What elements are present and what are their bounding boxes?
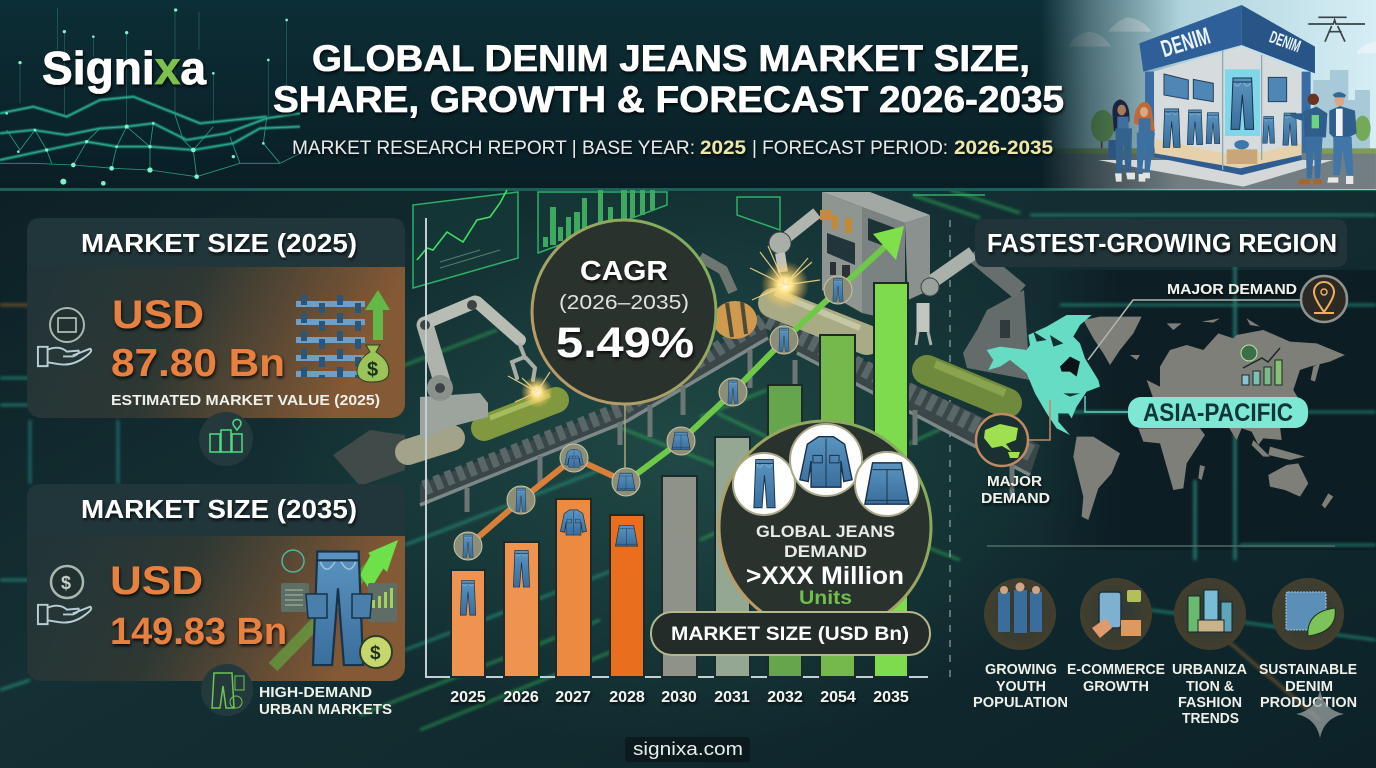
logo: Signixa [42, 42, 206, 94]
watermark sparkle [1296, 690, 1344, 738]
label: major demand left [981, 473, 1050, 507]
factor: e-commerce growth: E-COMMERCE [1067, 662, 1165, 678]
factory illustration [333, 190, 1040, 512]
factor: sustainable denim production: PRODUCTION [1260, 695, 1357, 711]
factor: growing youth population: YOUTH [996, 679, 1046, 695]
label: major demand left: DEMAND [981, 490, 1050, 507]
value: 149.83 Bn [110, 611, 287, 653]
world map [987, 315, 1345, 520]
year labels: 2032 [767, 689, 803, 706]
network graphic [0, 8, 300, 186]
year labels: 2054 [820, 689, 856, 706]
subtitle: | FORECAST PERIOD: [752, 138, 948, 159]
control cabinet [822, 192, 930, 323]
icon: people [998, 582, 1042, 633]
ground [1040, 153, 1376, 189]
green cylinders [484, 400, 556, 428]
robot arm top [769, 210, 832, 272]
skyline [1313, 70, 1370, 150]
legend pill: market size [651, 612, 930, 655]
icon: growth on map [1241, 345, 1282, 385]
subtitle: MARKET RESEARCH REPORT | BASE YEAR: [292, 138, 695, 159]
conveyor rising [420, 317, 768, 512]
subtitle [292, 138, 1053, 159]
demand text: Units [799, 588, 852, 609]
demand text: GLOBAL JEANS [756, 522, 895, 541]
label: major demand top: MAJOR DEMAND [1167, 281, 1297, 298]
heading: fastest-growing region: FASTEST-GROWING REGION [987, 228, 1337, 258]
callout: CAGR: CAGR [580, 255, 668, 286]
icon: location pin [1301, 276, 1347, 322]
icon: hand with device [38, 308, 91, 366]
panel header [27, 484, 405, 536]
footer [625, 737, 750, 762]
store illustration: DENIM [1158, 23, 1214, 63]
panel: market size 2035 [27, 484, 405, 681]
stem [624, 400, 626, 472]
bars [451, 283, 908, 677]
clouds [1068, 17, 1376, 53]
icon: hand with coin: $ [61, 573, 71, 593]
year labels: 2028 [609, 689, 645, 706]
callout: CAGR: 5.49% [556, 319, 694, 367]
caption: high-demand urban markets: HIGH-DEMAND [259, 685, 372, 701]
badge: asia-pacific: ASIA-PACIFIC [1143, 399, 1293, 427]
conveyor falling [758, 310, 1040, 500]
trend arrow [454, 226, 904, 560]
icon: skyscrapers [1188, 590, 1232, 632]
panel header: MARKET SIZE (2025) [81, 228, 357, 258]
sparks [508, 246, 820, 408]
divider [987, 545, 1335, 547]
caption: ESTIMATED MARKET VALUE (2025) [111, 392, 380, 409]
icon: phone and box [1092, 590, 1141, 638]
year labels: 2026 [503, 689, 539, 706]
connector: major demand top [1088, 300, 1301, 360]
footer: signixa.com [633, 739, 743, 759]
year labels: 2030 [661, 689, 697, 706]
orange drum [713, 301, 757, 339]
icon: urban market jeans [201, 664, 253, 716]
store illustration [1040, 0, 1376, 190]
factor: e-commerce growth [1067, 578, 1165, 695]
icon: denim patch with leaf [1286, 592, 1335, 636]
base behind left panel [333, 430, 405, 486]
factor: urbanization and fashion trends: FASHION [1178, 695, 1242, 711]
icon: jeans [733, 453, 795, 515]
factor: growing youth population: GROWING [985, 662, 1057, 678]
panel header [27, 218, 405, 267]
icon: skirt [855, 452, 919, 516]
callout: global jeans demand [719, 421, 931, 633]
factor: sustainable denim production: DENIM [1285, 679, 1333, 695]
people [1108, 92, 1357, 184]
icon: denim weave with arrow and money bag [296, 290, 390, 382]
year labels: 2035 [873, 689, 909, 706]
factor: growing youth population: POPULATION [973, 695, 1068, 711]
factor: urbanization and fashion trends: TION & [1186, 679, 1235, 695]
demand text: >XXX Million [746, 562, 904, 590]
year labels: 2025 [450, 689, 486, 706]
bar chart [426, 218, 928, 706]
caption: high-demand urban markets [259, 685, 392, 718]
factor: sustainable denim production: SUSTAINABLE [1259, 662, 1357, 678]
factor: urbanization and fashion trends [1172, 578, 1248, 727]
subtitle: 2026-2035 [954, 138, 1053, 159]
tan cylinders [408, 438, 452, 452]
factor: urbanization and fashion trends: TRENDS [1182, 711, 1239, 727]
value [111, 293, 285, 385]
value: USD [112, 293, 204, 337]
title: GLOBAL DENIM JEANS MARKET SIZE, [312, 38, 1030, 79]
factor: urbanization and fashion trends: URBANIZA [1172, 662, 1248, 678]
store sign [1139, 5, 1242, 72]
icon: jeans with growth arrow [273, 540, 398, 668]
demand text: DEMAND [784, 542, 867, 561]
trees [1091, 110, 1371, 148]
factor: growing youth population [973, 578, 1068, 711]
factor: e-commerce growth: GROWTH [1083, 679, 1149, 695]
year labels: 2031 [714, 689, 750, 706]
panel header: MARKET SIZE (2035) [81, 494, 357, 524]
icon: denim weave with arrow and money bag: $ [367, 359, 378, 381]
connector: major demand left [1028, 400, 1050, 440]
year labels [450, 689, 909, 706]
robot arm behind CAGR [700, 257, 733, 292]
title: SHARE, GROWTH & FORECAST 2026-2035 [273, 79, 1064, 120]
header band [0, 0, 1376, 191]
icon: jacket [790, 424, 862, 496]
monitor screens [413, 192, 985, 288]
icon: asia map circle [976, 414, 1028, 466]
store illustration: DENIM [1267, 27, 1304, 56]
robot arm right [916, 253, 1030, 380]
subtitle: 2025 [700, 138, 746, 159]
store [1153, 47, 1302, 175]
icon: city pin [199, 412, 253, 466]
icon: hand with coin [38, 566, 91, 624]
label: major demand left: MAJOR [987, 473, 1042, 490]
factor: sustainable denim production [1259, 578, 1357, 711]
callout: CAGR [532, 220, 716, 404]
drone [1308, 17, 1365, 42]
value: USD [110, 559, 203, 603]
legend pill: market size: MARKET SIZE (USD Bn) [671, 624, 909, 645]
demand text [746, 522, 904, 609]
callout: CAGR: (2026–2035) [559, 292, 689, 314]
year labels: 2027 [555, 689, 591, 706]
connector: asia-pacific [1085, 396, 1128, 412]
icon: jeans with growth arrow: $ [370, 643, 381, 664]
value [110, 559, 287, 653]
heading: fastest-growing region [975, 219, 1347, 267]
title [273, 38, 1064, 120]
value: 87.80 Bn [111, 342, 285, 385]
panel: market size 2025 [27, 218, 405, 418]
caption: high-demand urban markets: URBAN MARKETS [259, 702, 392, 718]
bar icons [460, 510, 638, 615]
robot arm left [420, 300, 535, 440]
